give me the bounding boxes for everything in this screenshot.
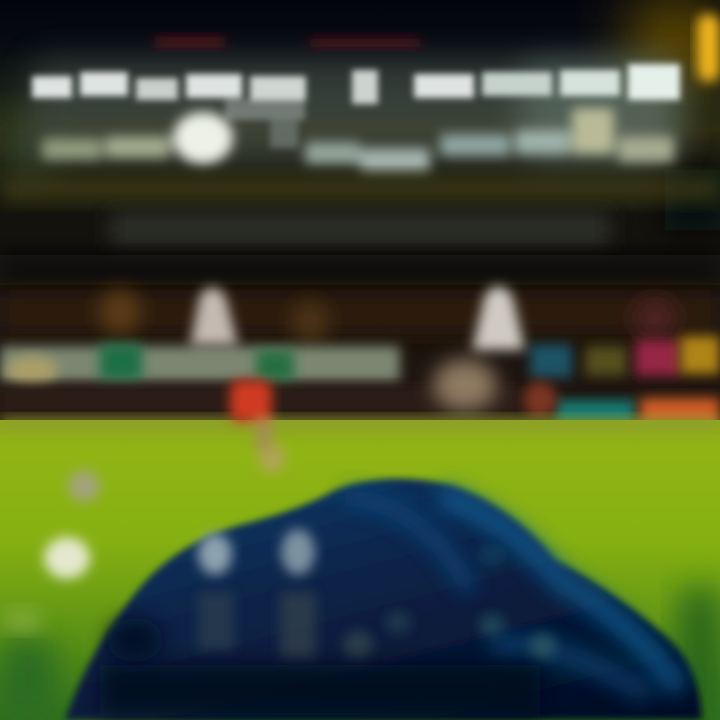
blurred title line xyxy=(32,64,680,148)
floodlight glow top right xyxy=(630,0,720,90)
footballs xyxy=(2,470,100,630)
background: night sky and stands xyxy=(0,0,720,430)
white player left xyxy=(190,288,238,345)
advertising boards xyxy=(0,336,720,430)
upper stands xyxy=(0,176,720,342)
pitch xyxy=(0,416,720,720)
blurred subtitle line xyxy=(42,108,674,172)
white player right xyxy=(472,286,525,350)
red player xyxy=(230,380,285,473)
red accents above title xyxy=(155,36,420,48)
title glow xyxy=(30,58,680,163)
blue jersey xyxy=(65,479,702,720)
